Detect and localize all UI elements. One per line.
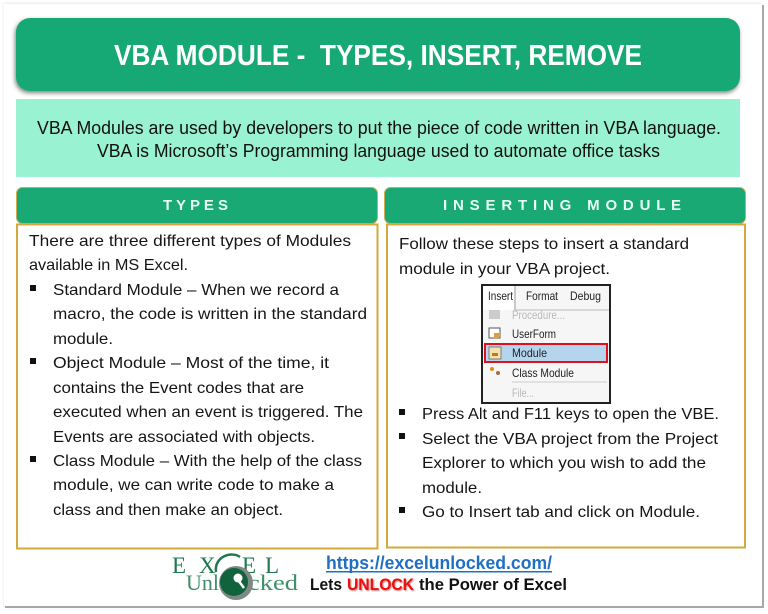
icon: insert menu screenshot xyxy=(482,285,610,403)
icon: insert menu screenshot: Module xyxy=(512,346,547,360)
icon: insert menu screenshot: Format xyxy=(526,289,559,303)
inserting heading xyxy=(384,188,746,224)
icon: insert menu screenshot: File... xyxy=(512,386,534,400)
types text: module, we can write code to make a xyxy=(53,477,334,494)
panel: types xyxy=(16,188,378,548)
icon: insert menu screenshot: Class Module xyxy=(512,366,574,380)
types heading: T Y P E S xyxy=(163,197,228,214)
types text: class and then make an object. xyxy=(53,502,283,519)
footer logo: L xyxy=(265,553,279,578)
inserting intro text: Follow these steps to insert a standard xyxy=(399,236,689,253)
intro panel xyxy=(16,99,740,177)
title banner: VBA MODULE - TYPES, INSERT, REMOVE xyxy=(114,40,642,72)
footer logo: cked xyxy=(248,570,298,595)
icon: insert menu screenshot: UserForm xyxy=(512,327,556,341)
inserting steps list xyxy=(399,406,719,521)
intro panel: VBA is Microsoft’s Programming language used to automate office tasks xyxy=(97,141,660,161)
types text: executed when an event is triggered. The xyxy=(53,404,363,421)
types text: Class Module – With the help of the class xyxy=(53,453,362,470)
footer logo: E xyxy=(172,553,186,578)
footer tagline xyxy=(310,576,567,594)
types body box xyxy=(17,224,378,548)
panel: inserting module xyxy=(384,188,746,548)
types text: Standard Module – When we record a xyxy=(53,282,339,299)
types heading xyxy=(16,188,378,224)
footer logo: X xyxy=(199,553,216,578)
icon: insert menu screenshot: Insert xyxy=(488,289,514,303)
footer logo: Unl xyxy=(186,570,219,595)
footer link: https://excelunlocked.com/ xyxy=(326,553,552,573)
icon: insert menu screenshot: Debug xyxy=(570,289,601,303)
icon: insert menu screenshot: Procedure... xyxy=(512,308,565,322)
types text: There are three different types of Modules xyxy=(29,233,351,250)
inserting steps list: Go to Insert tab and click on Module. xyxy=(422,504,700,521)
inserting body box xyxy=(387,224,745,548)
inserting steps list: module. xyxy=(422,480,482,497)
inserting intro text: module in your VBA project. xyxy=(399,261,610,278)
footer tagline: Lets xyxy=(310,576,342,594)
footer logo xyxy=(172,553,298,600)
title banner xyxy=(16,18,740,91)
types text: Events are associated with objects. xyxy=(53,429,315,446)
inserting intro text xyxy=(399,236,689,278)
types text: available in MS Excel. xyxy=(29,257,188,274)
inserting steps list: Press Alt and F11 keys to open the VBE. xyxy=(422,406,719,423)
types text: Object Module – Most of the time, it xyxy=(53,355,330,372)
types text: module. xyxy=(53,331,113,348)
inserting heading: I N S E R T I N G M O D U L E xyxy=(443,197,681,214)
types text: macro, the code is written in the standard xyxy=(53,306,367,323)
inserting steps list: Select the VBA project from the Project xyxy=(422,431,719,448)
types text: contains the Event codes that are xyxy=(53,380,304,397)
footer tagline: the Power of Excel xyxy=(419,576,567,594)
types text xyxy=(29,233,367,519)
footer logo: E xyxy=(242,553,256,578)
intro panel: VBA Modules are used by developers to put the piece of code written in VBA language. xyxy=(37,118,721,138)
inserting steps list: Explorer to which you wish to add the xyxy=(422,455,706,472)
footer tagline: UNLOCK xyxy=(347,576,414,594)
